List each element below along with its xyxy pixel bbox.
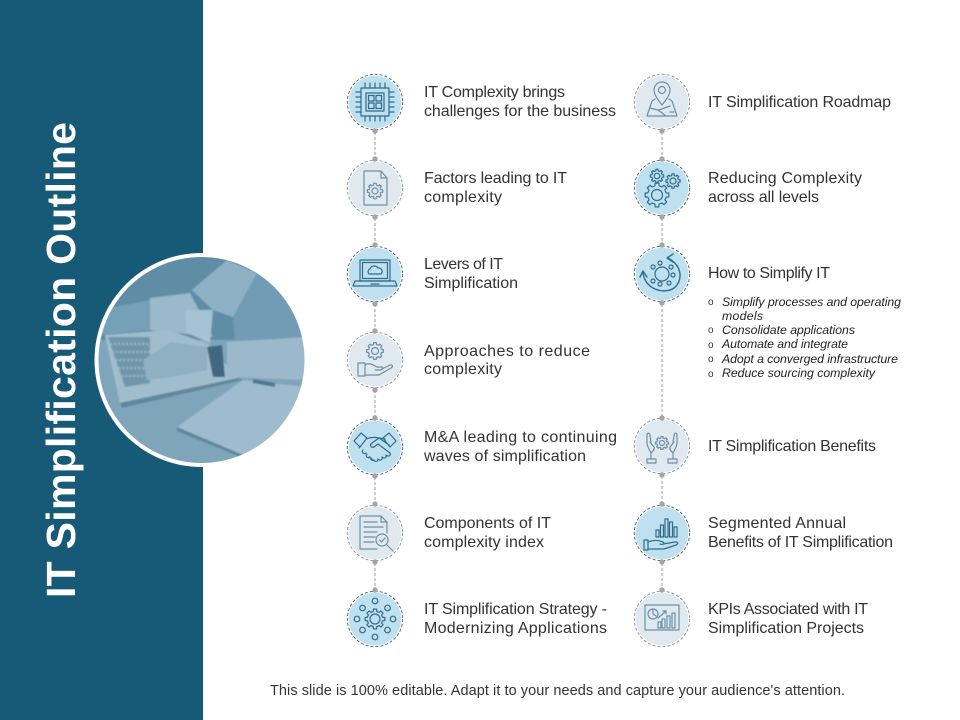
bullet list: how to simplify: Consolidate applications [722, 323, 855, 337]
bullet list: how to simplify: Simplify processes and operating [722, 295, 901, 309]
text: right column items: IT Simplification Roadmap [708, 94, 891, 111]
text: left column items: Modernizing Applications [424, 620, 607, 637]
text: right column items: Segmented Annual [708, 515, 846, 532]
text: left column items: waves of simplification [423, 448, 586, 465]
text: right column items: IT Simplification Benefits [708, 438, 876, 455]
connectors: left column [372, 128, 378, 593]
text: left column items: Approaches to reduce [424, 343, 590, 360]
icon: laptop with cloud [347, 246, 403, 302]
bullet list: how to simplify: Adopt a converged infrastructure [721, 352, 898, 366]
bullet list: how to simplify: o [708, 340, 714, 351]
footer note: This slide is 100% editable. Adapt it to your needs and capture your audience's attention. [270, 683, 845, 699]
icon: three gears [634, 160, 690, 216]
text: left column items: Levers of IT [424, 256, 503, 273]
text: right column items [708, 94, 893, 637]
bullet list: how to simplify: o [708, 297, 714, 308]
photo: hands typing on a laptop [90, 250, 315, 470]
icon: processor chip [347, 74, 403, 130]
text: left column items: Simplification [424, 275, 518, 292]
text: left column items: Factors leading to IT [424, 170, 567, 187]
connectors: right column [659, 128, 665, 593]
text: left column items: complexity [424, 361, 502, 378]
title: IT Simplification Outline [38, 122, 84, 598]
text: right column items: across all levels [708, 189, 819, 206]
icon: gear between two hands [634, 418, 690, 474]
icon: network gear [347, 591, 403, 647]
side panel [0, 0, 203, 720]
text: right column items: Benefits of IT Simplification [708, 534, 893, 551]
icon: gear over open hand [347, 332, 403, 388]
text: right column items: Simplification Projects [708, 620, 864, 637]
text: right column items: KPIs Associated with IT [708, 601, 868, 618]
text: right column items: How to Simplify IT [708, 265, 830, 282]
bullet list: how to simplify: Automate and integrate [721, 337, 848, 351]
bullet list: how to simplify: o [708, 354, 714, 365]
text: left column items: IT Complexity brings [424, 84, 565, 101]
icon: map with location pin [634, 74, 690, 130]
text: left column items: IT Simplification Strategy - [424, 601, 607, 618]
bullet list: how to simplify: Reduce sourcing complexity [722, 366, 876, 380]
bullet list: how to simplify: models [722, 309, 763, 323]
bullet list: how to simplify: o [708, 325, 714, 336]
bullet list: how to simplify: o [708, 369, 714, 380]
icon: document with magnifier [347, 505, 403, 561]
icon: presentation board with chart [634, 591, 690, 647]
text: left column items: challenges for the business [424, 103, 616, 120]
text: left column items: complexity index [424, 534, 544, 551]
text: left column items: Components of IT [424, 515, 551, 532]
text: left column items: complexity [424, 189, 502, 206]
text: left column items: M&A leading to continuing [424, 429, 617, 446]
icon: bar chart over hand [634, 505, 690, 561]
icon: circular arrows around network [634, 246, 690, 302]
text: left column items [423, 84, 617, 637]
icon: document with gear [347, 160, 403, 216]
icon: handshake [347, 419, 403, 475]
bullet list: how to simplify [708, 295, 901, 380]
text: right column items: Reducing Complexity [708, 170, 862, 187]
